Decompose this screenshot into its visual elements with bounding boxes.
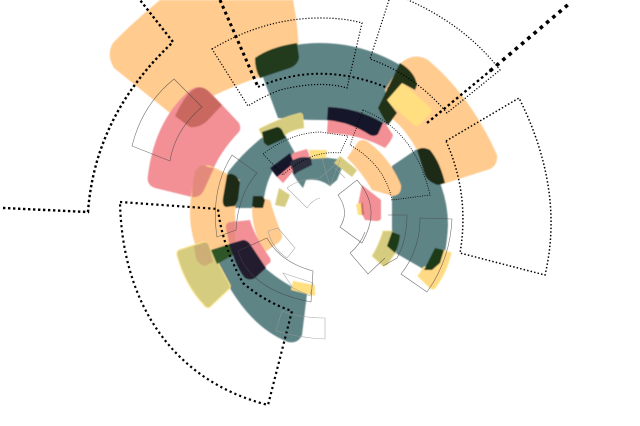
segment: navy lower — [229, 240, 266, 280]
segment: pink small right — [358, 185, 381, 221]
overlap: orange with pink top-left — [175, 88, 222, 127]
overlap: orange with pink ring — [192, 165, 214, 197]
segment: olive centre — [334, 156, 357, 177]
overlap: dark green top-right — [378, 63, 417, 125]
heavy dotted arc top — [258, 74, 388, 88]
overlap: dark green lower right 2 — [424, 248, 444, 270]
segment: navy top — [327, 107, 383, 136]
segment: orange left ring — [190, 165, 242, 266]
segment: teal middle ring — [222, 133, 296, 208]
segment: pink lower left — [226, 220, 271, 268]
segment: pink left — [148, 87, 240, 197]
heavy dotted radial arrow: inner part — [427, 71, 490, 123]
segment: teal inner ring — [292, 157, 345, 188]
segment: orange top-left — [110, 0, 299, 117]
heavy dotted sector bottom-left — [120, 202, 292, 405]
segment: olive lower left — [177, 242, 230, 308]
heavy dotted radial top — [220, 0, 258, 87]
thin grey sector outlines — [132, 79, 452, 339]
heavy dotted outline: top-left sector — [3, 0, 173, 212]
segment: yellow small top — [309, 150, 327, 159]
overlap: red on yellow small — [361, 203, 364, 215]
overlap: orange with pink lower — [226, 221, 235, 243]
dotted sector top — [212, 18, 362, 106]
overlap: dark green right — [417, 148, 445, 185]
segment: yellow lower right — [418, 250, 451, 289]
coloured ring segments — [110, 0, 497, 342]
heavy dotted radial arrow: outer part — [490, 3, 570, 71]
fine dotted sector centre right — [350, 110, 430, 200]
overlap: dark green olive top — [262, 127, 286, 146]
segment: yellow top right — [388, 84, 432, 126]
fine dotted sector centre left — [263, 132, 348, 175]
light grey sector outlines — [268, 158, 345, 339]
dotted sector top-right — [370, 0, 500, 113]
segment: navy small — [270, 153, 294, 177]
segment: yellow bottom tab — [291, 281, 315, 296]
segment: orange inner left — [252, 198, 282, 252]
segment: olive top small — [259, 113, 304, 140]
overlap: orange with olive — [194, 242, 213, 266]
overlap: dark green top-left — [255, 43, 299, 78]
segment: teal top — [256, 43, 405, 134]
segment: orange top-right — [385, 56, 497, 184]
segment: olive centre left — [275, 188, 290, 207]
overlap: dark green lower right 1 — [387, 232, 400, 253]
segment: orange centre right — [347, 140, 401, 196]
overlap: dark green inner — [252, 196, 265, 208]
dotted sector right — [446, 98, 551, 275]
segment: olive lower right — [372, 231, 396, 266]
segment: slate small — [290, 157, 312, 175]
segment: teal right — [392, 147, 448, 272]
segment: yellow small right — [356, 203, 362, 215]
overlap: green sliver — [211, 244, 233, 264]
overlap: dark green left — [223, 174, 240, 207]
segment: pink upper ring — [327, 118, 393, 148]
segment: pink small upper — [277, 149, 311, 183]
segment: teal lower — [212, 246, 307, 342]
